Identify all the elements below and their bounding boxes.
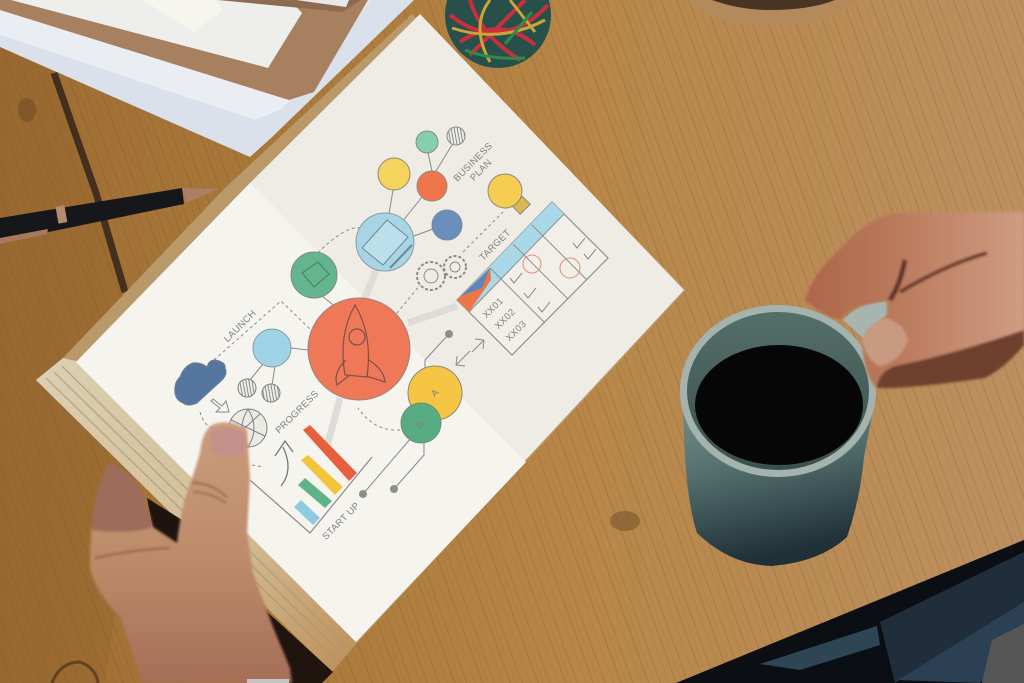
left hand holding notebook	[90, 422, 333, 683]
mug rim	[680, 305, 876, 477]
progress label: PROGRESS	[274, 389, 321, 436]
mind map drawing	[175, 127, 608, 542]
rocket circle	[308, 298, 410, 400]
notebook cover	[36, 14, 686, 672]
spines	[328, 268, 457, 443]
ball of colourful yarn	[445, 0, 551, 68]
grey end dots	[359, 330, 453, 498]
clothing under the table edge	[676, 540, 1024, 683]
page right section	[76, 14, 684, 642]
download arrow	[211, 399, 229, 412]
coffee mug	[680, 302, 890, 566]
laptop circle	[356, 213, 414, 271]
cloud icon	[175, 360, 226, 405]
launch label: LAUNCH	[222, 308, 259, 345]
venn circles: A	[429, 387, 442, 400]
open notebook	[36, 14, 686, 672]
mug body	[682, 395, 876, 566]
pen	[0, 188, 218, 244]
business plan circles	[378, 127, 465, 240]
venn circles: B	[414, 419, 427, 432]
target table: XX03	[504, 319, 529, 344]
globe icon	[229, 409, 267, 447]
lighter lower left page	[76, 183, 526, 642]
light bulb icon	[488, 174, 530, 214]
notebook page edges	[36, 358, 358, 672]
gears icon	[417, 256, 466, 290]
two way arrows	[456, 339, 484, 366]
bar chart	[250, 425, 372, 533]
connector lines	[250, 145, 452, 494]
target table	[457, 202, 608, 355]
dashed connectors	[200, 212, 503, 467]
bowl at top	[688, 0, 857, 25]
target table: XX01	[481, 296, 506, 321]
target table: XX02	[493, 307, 518, 332]
coffee	[695, 345, 863, 465]
business plan label: BUSINESS	[452, 141, 495, 184]
venn circles	[401, 366, 462, 443]
target label: TARGET	[477, 227, 513, 263]
start up label: START UP	[320, 500, 362, 542]
business plan label: PLAN	[468, 157, 494, 183]
mug handle	[843, 302, 890, 338]
folder circle	[291, 252, 337, 298]
stack of papers and envelopes	[0, 0, 414, 157]
right hand holding mug	[805, 212, 1024, 388]
launch circle group	[238, 329, 291, 402]
growth arrow	[275, 441, 293, 486]
